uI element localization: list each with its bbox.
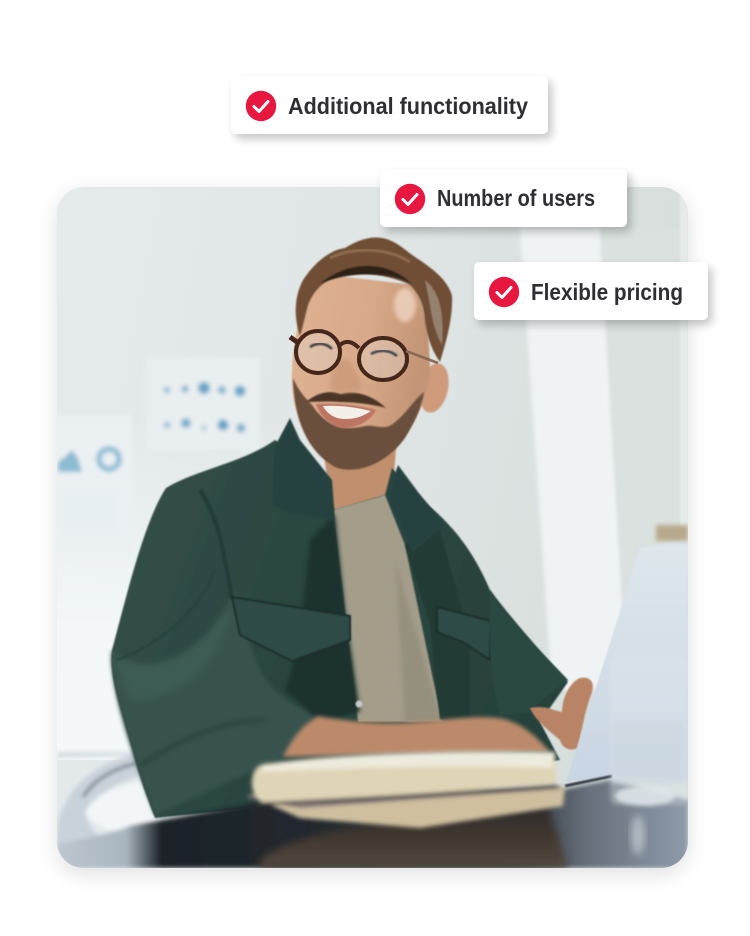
- jacket placket: [285, 515, 360, 722]
- photo: smiling man at a laptop: [50, 187, 688, 868]
- hair: [296, 237, 452, 362]
- glasses: [290, 331, 438, 380]
- t-shirt: [333, 495, 442, 722]
- wall poster with charts: [57, 418, 130, 474]
- office wall background: [57, 187, 688, 868]
- jacket collar left: [272, 418, 335, 520]
- ear: [421, 362, 450, 414]
- badge: Number of users: [380, 169, 631, 232]
- label: Additional functionality: [288, 93, 528, 119]
- teeth: [323, 406, 371, 419]
- sleeve highlight fold: [110, 634, 218, 694]
- sleeve shading: [112, 590, 318, 815]
- books: [248, 751, 565, 828]
- photo card shadow: [57, 193, 688, 874]
- beard: [293, 378, 424, 470]
- laptop: [565, 525, 688, 786]
- glass of water: [608, 774, 686, 808]
- neck: [324, 448, 397, 510]
- forearm and hand on book: [283, 716, 550, 757]
- button: [356, 700, 362, 708]
- man: [111, 237, 593, 818]
- wall poster with blue dots: [162, 362, 256, 434]
- jacket body: [111, 440, 568, 818]
- icon: check: [246, 91, 276, 121]
- icon: check: [395, 184, 425, 214]
- label: Number of users: [437, 185, 595, 211]
- sleeve folds: [140, 720, 265, 765]
- chair: [57, 750, 157, 847]
- badge: Additional functionality: [231, 76, 552, 139]
- table: [57, 780, 688, 868]
- face: [291, 276, 431, 443]
- right sleeve: [489, 590, 569, 682]
- right hand on laptop: [530, 678, 593, 750]
- label: Flexible pricing: [531, 279, 683, 305]
- left chest pocket flap: [232, 597, 350, 661]
- moustache: [306, 392, 386, 408]
- nose: [330, 360, 362, 393]
- jacket collar right: [394, 464, 436, 550]
- badge: Flexible pricing: [474, 262, 712, 325]
- forehead highlight: [394, 288, 416, 322]
- eyes: [310, 344, 332, 349]
- right chest pocket flap: [437, 607, 491, 660]
- icon: check: [489, 277, 519, 307]
- mouth and smile: [316, 404, 376, 428]
